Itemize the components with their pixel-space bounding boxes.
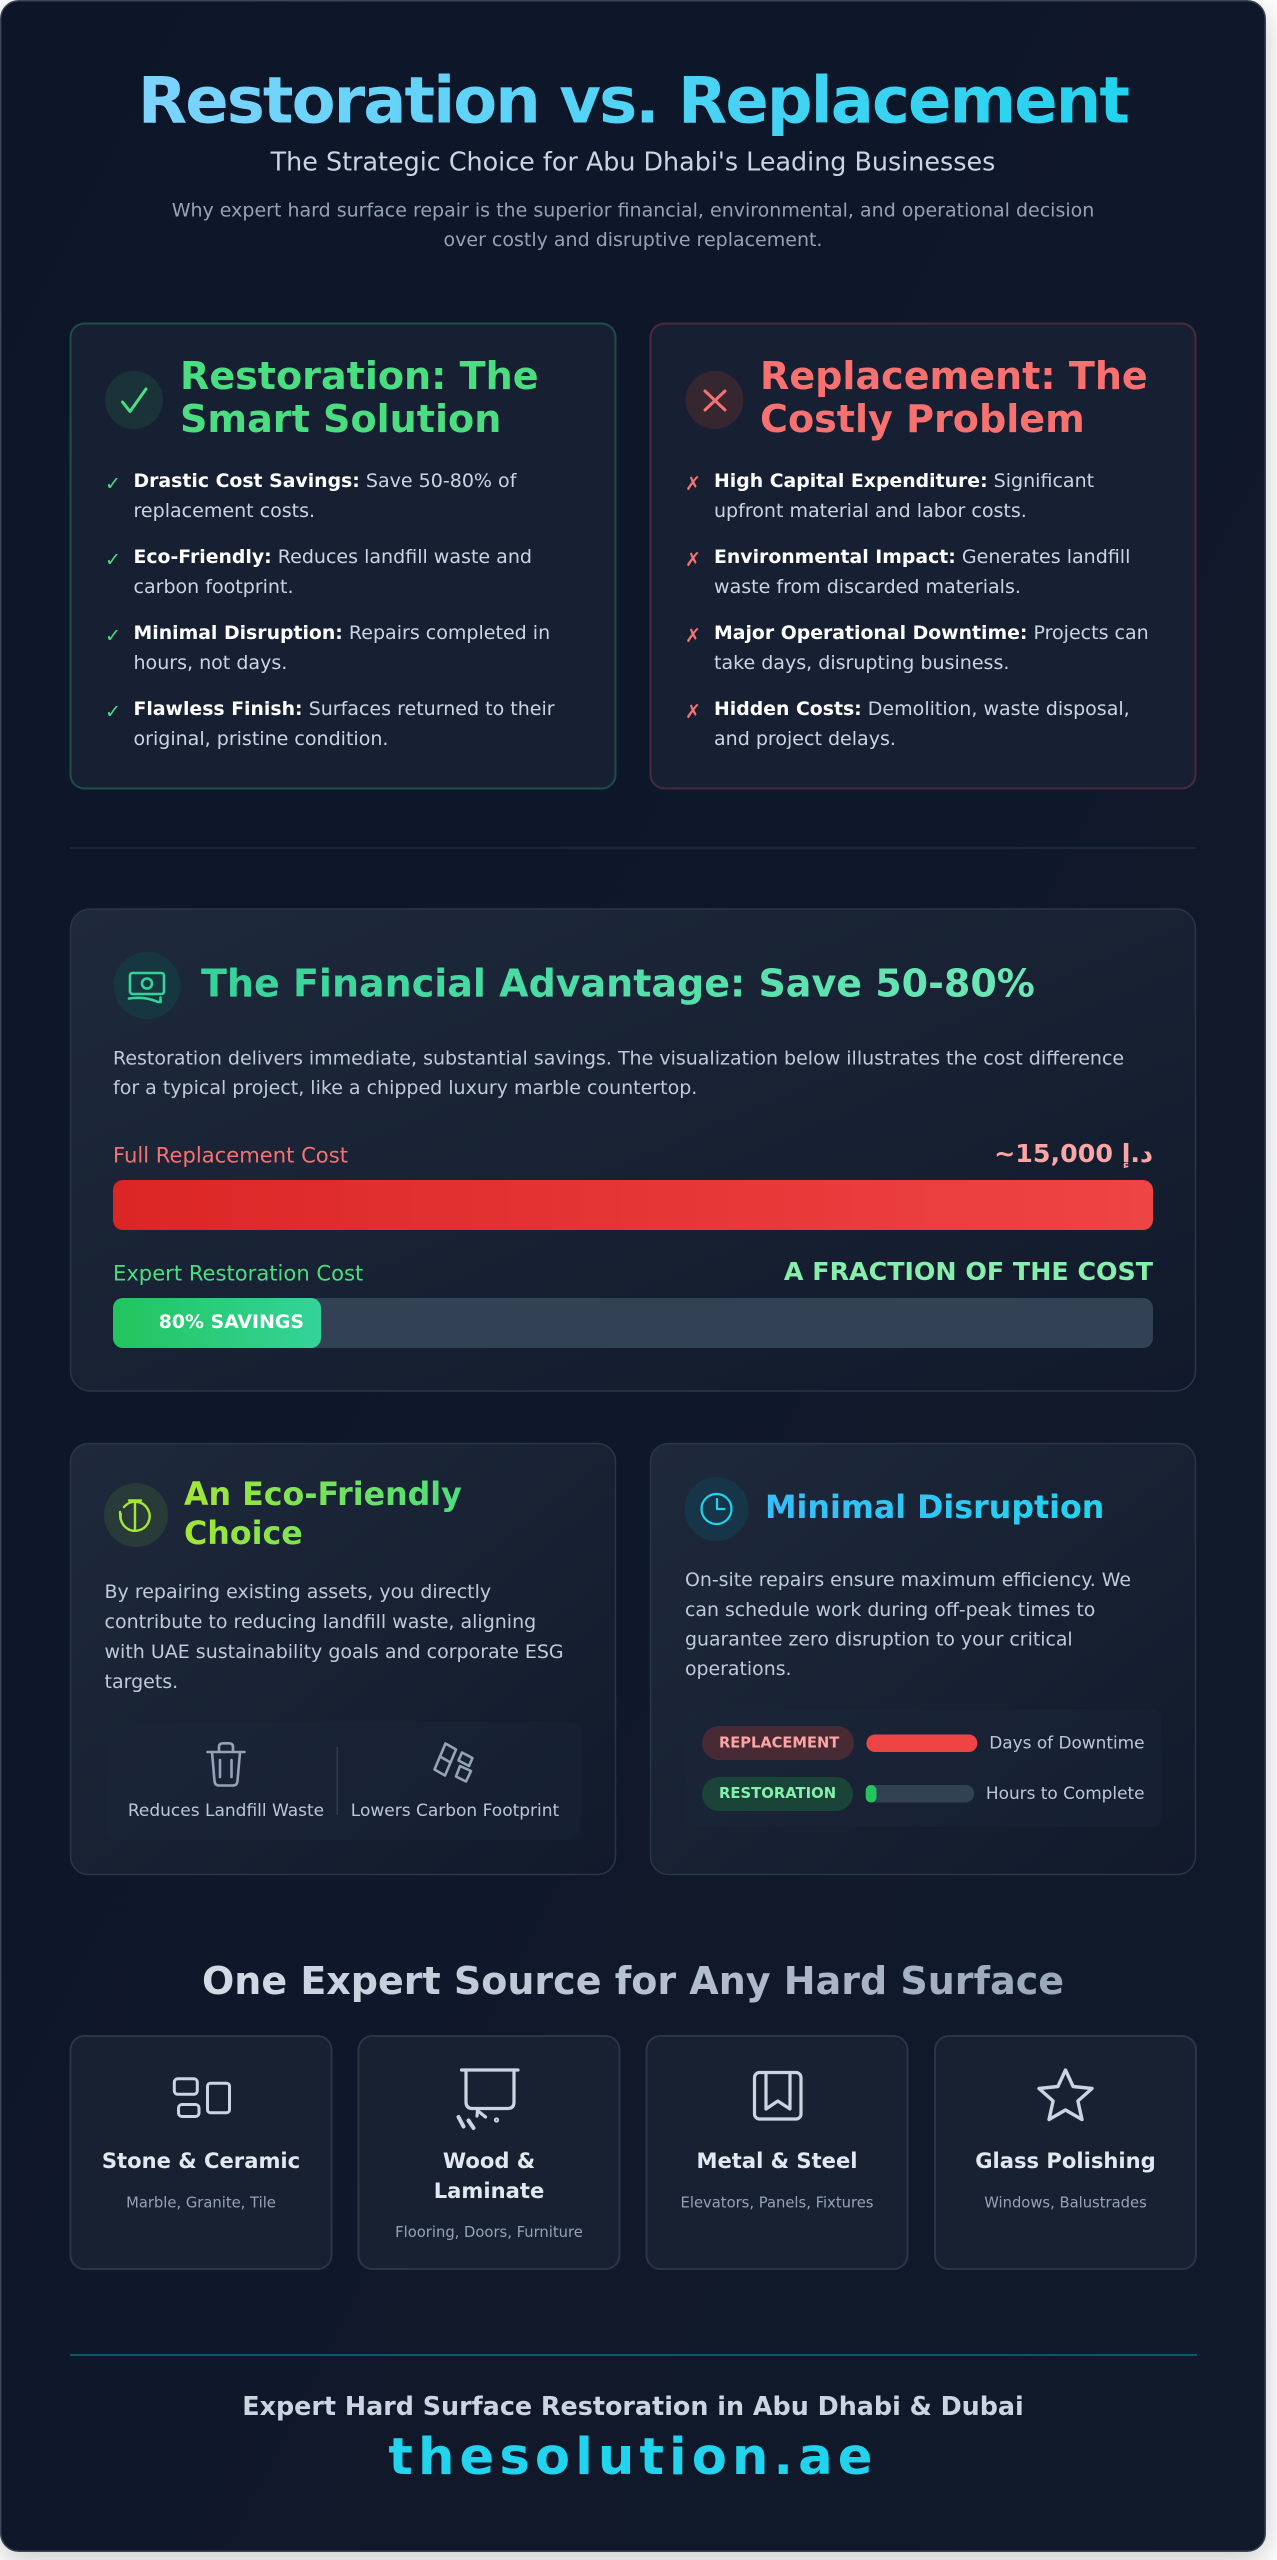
disruption text: guarantee zero disruption to your critical <box>685 1628 1073 1650</box>
heading: minimal disruption: Minimal Disruption <box>765 1490 1104 1526</box>
benefit: minimal disruption: hours, not days. <box>134 652 287 674</box>
benefit: cost savings: replacement costs. <box>134 500 315 522</box>
drawback: downtime: ✗ <box>685 625 701 647</box>
drawback: downtime: take days, disrupting business. <box>714 652 1009 674</box>
drawback: capital expenditure: upfront material and labor costs. <box>714 500 1027 522</box>
heading: eco-friendly: Choice <box>184 1516 303 1552</box>
icon: eco <box>104 1483 168 1547</box>
eco metrics box <box>106 1722 581 1840</box>
drawback: downtime <box>685 622 1149 674</box>
panel: metal and steel: Metal & Steel <box>696 2148 858 2173</box>
drawback: hidden costs: and project delays. <box>714 728 896 750</box>
drawback: downtime: Major Operational Downtime: Projects can <box>714 622 1149 644</box>
footer brand: thesolution.ae <box>388 2427 878 2487</box>
panel: stone and ceramic: Stone & Ceramic <box>102 2148 300 2173</box>
chart: replacement cost bar: ~15,000 د.إ <box>994 1139 1153 1169</box>
metric: carbon footprint: Lowers Carbon Footprint <box>351 1801 560 1821</box>
heading: restoration <box>180 354 539 441</box>
metric: landfill waste: Reduces Landfill Waste <box>128 1801 324 1821</box>
panel: wood and laminate: Flooring, Doors, Furniture <box>395 2224 583 2241</box>
heading: financial advantage: The Financial Advantage: Save 50-80% <box>201 962 1035 1006</box>
heading: replacement: Costly Problem <box>760 397 1085 441</box>
benefit: flawless finish: original, pristine condition. <box>134 728 388 750</box>
eco text: with UAE sustainability goals and corporate ESG <box>104 1641 564 1663</box>
drawback: environmental impact: Environmental Impact: Generates landfill <box>714 546 1130 568</box>
drawback: environmental impact: ✗ <box>685 549 701 571</box>
intro text: over costly and disruptive replacement. <box>444 229 822 251</box>
benefit list <box>105 470 555 750</box>
drawback: hidden costs: ✗ <box>685 701 701 723</box>
benefit: flawless finish: ✓ <box>105 701 121 723</box>
benefit: eco friendly: carbon footprint. <box>134 576 294 598</box>
panel: metal and steel: Elevators, Panels, Fixtures <box>681 2195 873 2212</box>
heading: restoration: Restoration: The <box>180 354 539 398</box>
heading: eco-friendly: An Eco-Friendly <box>184 1477 462 1513</box>
footer <box>242 2391 1024 2487</box>
heading: replacement: Replacement: The <box>760 354 1148 398</box>
icon: clock <box>684 1477 748 1541</box>
icon: wood <box>458 2070 518 2128</box>
heading: replacement <box>760 354 1148 441</box>
panel: glass polishing: Glass Polishing <box>975 2148 1156 2173</box>
row: replacement downtime: REPLACEMENT <box>719 1734 839 1751</box>
benefit: minimal disruption: Minimal Disruption: Repairs completed in <box>134 622 550 644</box>
panel: replacement <box>650 324 1196 788</box>
benefit: eco friendly: Eco-Friendly: Reduces landfill waste and <box>134 546 532 568</box>
row: restoration hours: RESTORATION <box>719 1785 836 1802</box>
drawback: hidden costs: Hidden Costs: Demolition, waste disposal, <box>714 698 1130 720</box>
intro text <box>172 200 1094 251</box>
disruption text: On-site repairs ensure maximum efficiency. We <box>685 1569 1131 1591</box>
timeline comparison box <box>686 1709 1162 1827</box>
panel: eco-friendly <box>70 1444 616 1874</box>
drawback: hidden costs <box>685 698 1130 750</box>
eco text <box>104 1581 564 1693</box>
chart: replacement cost bar <box>113 1139 1153 1230</box>
panel: wood and laminate: Laminate <box>434 2178 544 2203</box>
footer tagline: Expert Hard Surface Restoration in Abu Dhabi & Dubai <box>242 2391 1024 2421</box>
icon: check <box>105 371 163 429</box>
panel: wood and laminate <box>358 2036 620 2269</box>
eco text: contribute to reducing landfill waste, aligning <box>104 1611 536 1633</box>
drawback: capital expenditure: High Capital Expenditure: Significant <box>714 470 1094 492</box>
icon: cross <box>686 371 744 429</box>
heading: eco-friendly <box>184 1477 462 1552</box>
header <box>138 65 1129 251</box>
eco text: By repairing existing assets, you directly <box>104 1581 491 1603</box>
panel: restoration <box>70 324 616 788</box>
chart: replacement cost bar: Full Replacement Cost <box>113 1143 348 1168</box>
heading: restoration: Smart Solution <box>180 397 501 441</box>
icon: money <box>114 952 180 1019</box>
panel: wood and laminate: Wood & <box>443 2148 535 2173</box>
benefit: minimal disruption <box>105 622 550 674</box>
icon: metal <box>754 2072 801 2119</box>
metric: carbon footprint <box>351 1744 560 1821</box>
icon: star <box>1039 2070 1092 2120</box>
title: Restoration vs. Replacement <box>138 65 1129 139</box>
panel: glass polishing <box>935 2036 1196 2269</box>
chart: restoration cost bar: Expert Restoration Cost <box>113 1261 363 1286</box>
icon: stone <box>174 2079 230 2116</box>
drawback: environmental impact <box>685 546 1130 598</box>
panel: metal and steel <box>646 2036 908 2269</box>
panel: minimal disruption <box>650 1444 1196 1874</box>
benefit: flawless finish: Flawless Finish: Surfaces returned to their <box>134 698 555 720</box>
disruption text: can schedule work during off-peak times to <box>685 1599 1095 1621</box>
metric: landfill waste <box>128 1743 324 1821</box>
disruption text: operations. <box>685 1658 792 1680</box>
eco text: targets. <box>104 1671 178 1693</box>
panel: glass polishing: Windows, Balustrades <box>984 2195 1147 2212</box>
row: replacement downtime <box>702 1726 1144 1760</box>
chart: restoration cost bar: 80% SAVINGS <box>159 1311 304 1333</box>
benefit: cost savings: Drastic Cost Savings: Save 50-80% of <box>134 470 518 492</box>
benefit: flawless finish <box>105 698 555 750</box>
drawback list <box>685 470 1149 750</box>
benefit: eco friendly <box>105 546 532 598</box>
intro text: Why expert hard surface repair is the superior financial, environmental, and operational decision <box>172 200 1094 222</box>
benefit: cost savings: ✓ <box>105 473 121 495</box>
row: replacement downtime: Days of Downtime <box>989 1732 1144 1752</box>
disruption text <box>685 1569 1131 1680</box>
chart: restoration cost bar: A FRACTION OF THE COST <box>784 1257 1154 1286</box>
subtitle: The Strategic Choice for Abu Dhabi's Leading Businesses <box>270 146 995 176</box>
financial intro text: for a typical project, like a chipped luxury marble countertop. <box>113 1077 697 1099</box>
panel: stone and ceramic <box>70 2036 332 2269</box>
panel: stone and ceramic: Marble, Granite, Tile <box>126 2195 276 2212</box>
drawback: capital expenditure: ✗ <box>685 473 701 495</box>
financial intro text <box>113 1048 1124 1099</box>
row: restoration hours <box>702 1777 1144 1811</box>
drawback: capital expenditure <box>685 470 1094 522</box>
section heading: One Expert Source for Any Hard Surface <box>202 1959 1064 2003</box>
drawback: environmental impact: waste from discarded materials. <box>714 576 1021 598</box>
chart: restoration cost bar <box>113 1257 1154 1348</box>
financial intro text: Restoration delivers immediate, substantial savings. The visualization below illustrates the cost difference <box>113 1048 1124 1070</box>
benefit: cost savings <box>105 470 518 522</box>
panel: financial advantage <box>70 909 1196 1391</box>
row: restoration hours: Hours to Complete <box>986 1783 1144 1803</box>
benefit: minimal disruption: ✓ <box>105 625 121 647</box>
benefit: eco friendly: ✓ <box>105 549 121 571</box>
